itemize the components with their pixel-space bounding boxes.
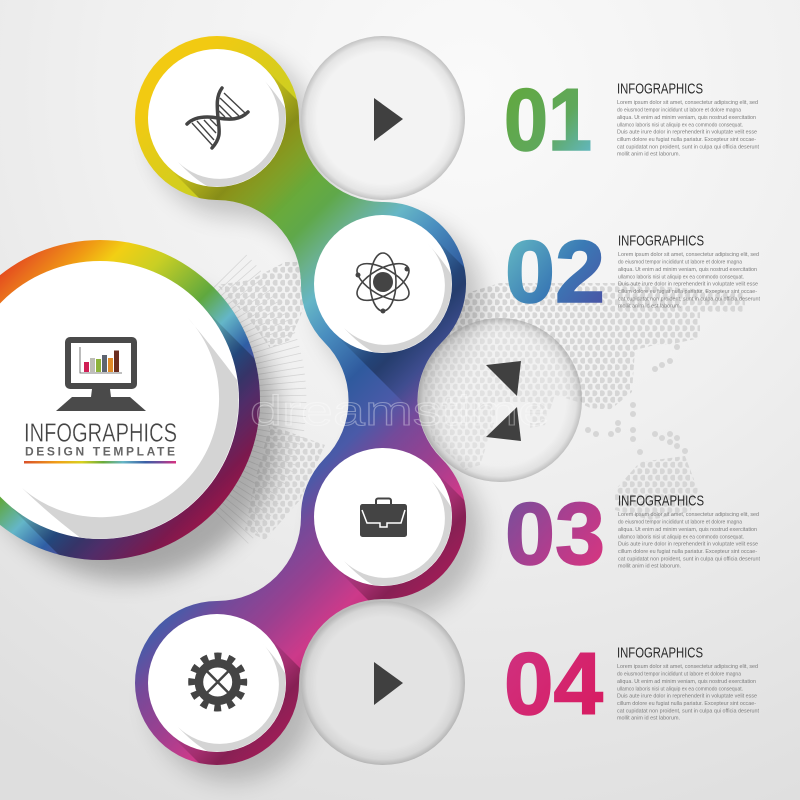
title text: INFOGRAPHICS [24,420,177,448]
body copy: Lorem ipsum dolor sit amet, consectetur adipiscing elit, sed [617,664,758,670]
panel: gear disc [148,614,286,752]
body copy: mollit anim id est laborum. [617,152,680,158]
icon: top triangle [486,361,521,396]
body copy: mollit anim id est laborum. [618,564,681,570]
panel: gradient connector [135,36,466,765]
body copy [617,664,759,722]
body copy: do eiusmod tempor incididunt ut labore et dolore magna [617,108,742,114]
body copy: ullamco laboris nisi ut aliquip ex ea commodo consequat. [618,534,744,540]
body copy: aliqua. Ut enim ad minim veniam, quis nostrud exercitation [617,679,756,685]
panel: DNA disc [148,49,286,187]
panel: briefcase disc [314,448,452,586]
number 03: 03 [505,484,605,583]
body copy: Lorem ipsum dolor sit amet, consectetur adipiscing elit, sed [617,100,758,106]
heading: INFOGRAPHICS [617,82,703,98]
body copy [617,100,759,158]
large rainbow ring [0,240,260,560]
icon: atom [351,253,415,314]
inset circle: middle arrows [418,318,582,482]
heading: INFOGRAPHICS [618,494,704,510]
body copy: do eiusmod tempor incididunt ut labore et dolore magna [618,260,743,266]
body copy: cillum dolore eu fugiat nulla pariatur. Excepteur sint occae- [617,701,756,707]
body copy: Duis aute irure dolor in reprehenderit in voluptate velit esse [617,694,757,700]
inset circle: bottom play button [301,601,465,765]
icon: play arrow [374,662,403,705]
panel: atom disc [314,215,452,353]
rainbow underline [24,461,176,464]
body copy: mollit anim id est laborum. [618,304,681,310]
body copy [618,512,760,570]
body copy: cat cupidatat non proident, sunt in culpa qui officia deserunt [617,708,759,714]
body copy: do eiusmod tempor incididunt ut labore et dolore magna [618,520,743,526]
text block 03 [618,494,760,570]
body copy: Duis aute irure dolor in reprehenderit in voluptate velit esse [618,542,758,548]
body copy: ullamco laboris nisi ut aliquip ex ea commodo consequat. [617,686,743,692]
body copy: cillum dolore eu fugiat nulla pariatur. Excepteur sint occae- [617,137,756,143]
body copy: Duis aute irure dolor in reprehenderit in voluptate velit esse [618,282,758,288]
number 01: 01 [504,70,592,169]
body copy: cat cupidatat non proident, sunt in culpa qui officia deserunt [617,144,759,150]
text block 01 [617,82,759,158]
body copy: ullamco laboris nisi ut aliquip ex ea commodo consequat. [617,122,743,128]
body copy: mollit anim id est laborum. [617,716,680,722]
icon: briefcase [360,498,407,537]
body copy: aliqua. Ut enim ad minim veniam, quis nostrud exercitation [618,267,757,273]
body copy: do eiusmod tempor incididunt ut labore et dolore magna [617,672,742,678]
heading: INFOGRAPHICS [617,646,703,662]
body copy: cillum dolore eu fugiat nulla pariatur. Excepteur sint occae- [618,549,757,555]
icon: bottom triangle [486,407,521,441]
number 04: 04 [504,634,603,733]
heading: INFOGRAPHICS [618,234,704,250]
icon: DNA helix [187,88,248,148]
icon: play arrow [374,98,403,141]
inset circle: top play button [301,36,465,200]
body copy [618,252,760,310]
body copy: aliqua. Ut enim ad minim veniam, quis nostrud exercitation [618,527,757,533]
world map dots [217,262,745,540]
text block 02 [618,234,760,310]
body copy: aliqua. Ut enim ad minim veniam, quis nostrud exercitation [617,115,756,121]
body copy: cillum dolore eu fugiat nulla pariatur. Excepteur sint occae- [618,289,757,295]
icon: monitor with bar chart [56,337,146,411]
radial hatch lines [228,273,280,527]
number 02: 02 [505,222,605,321]
watermark: dreamstime [250,387,550,434]
body copy: Duis aute irure dolor in reprehenderit in voluptate velit esse [617,130,757,136]
body copy: Lorem ipsum dolor sit amet, consectetur adipiscing elit, sed [618,252,759,258]
body copy: cat cupidatat non proident, sunt in culpa qui officia deserunt [618,556,760,562]
subtitle text: DESIGN TEMPLATE [25,444,175,458]
drop shadows [0,52,482,781]
body copy: ullamco laboris nisi ut aliquip ex ea commodo consequat. [618,274,744,280]
body copy: Lorem ipsum dolor sit amet, consectetur adipiscing elit, sed [618,512,759,518]
body copy: cat cupidatat non proident, sunt in culpa qui officia deserunt [618,296,760,302]
panel: main title disc [0,261,239,539]
icon: gear [192,656,243,708]
text block 04 [617,646,759,722]
